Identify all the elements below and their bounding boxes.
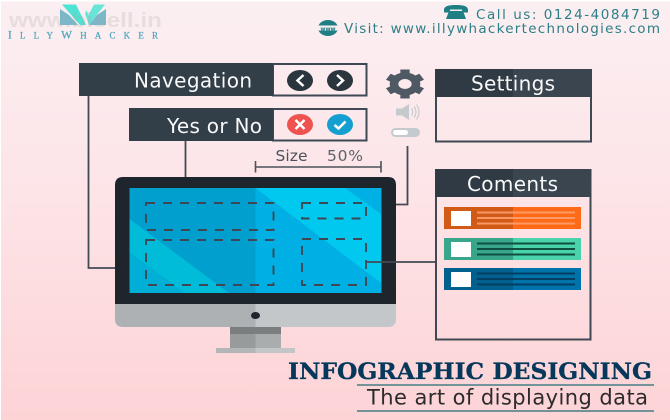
heading: yes or no: Yes or No: [166, 114, 262, 138]
stand: [216, 327, 295, 353]
comment: green: [444, 238, 581, 260]
icon: speaker: [396, 104, 419, 120]
button: yes: [327, 114, 353, 135]
comment: blue: [444, 268, 581, 290]
subtitle: The art of displaying data: [366, 386, 648, 410]
logo: IllyWhacker: I LLY W HACKER: [8, 30, 158, 42]
title: INFOGRAPHIC DESIGNING: [288, 359, 652, 385]
screen: [130, 188, 382, 293]
panel: navigation: [79, 63, 366, 96]
icon: globe www: [318, 20, 338, 36]
heading: comments: Coments: [467, 172, 558, 196]
size indicator: [256, 147, 381, 172]
monitor: [115, 177, 396, 353]
heading: settings: Settings: [471, 72, 555, 96]
logo: IllyWhacker: [8, 4, 158, 42]
icon: telephone: [444, 5, 468, 19]
button: forward: [327, 70, 353, 91]
comment: orange: [444, 207, 581, 229]
icon: toggle: [391, 128, 420, 137]
icon: globe www: www: [320, 26, 336, 32]
heading: navigation: Navegation: [134, 68, 252, 92]
panel: settings: [435, 69, 592, 142]
label: size: Size: [276, 147, 308, 165]
button: no: [287, 114, 313, 135]
connector: yes or no to screen: [184, 141, 186, 203]
panel: yes or no: [129, 108, 366, 141]
monitor body: [115, 177, 396, 304]
watermark: www.bisell.in: www.bisell.in: [8, 9, 162, 32]
contact: website: Visit: www.illywhackertechnologies.com: [344, 21, 660, 37]
connector: settings to screen: [366, 146, 408, 204]
label: 50%: 50%: [327, 147, 363, 165]
panel: comments: [435, 169, 592, 340]
icon: gear: [386, 70, 424, 98]
connector: comments to screen: [366, 261, 435, 263]
button: back: [287, 70, 313, 91]
contact: call us: Call us: 0124-4084719: [476, 7, 660, 23]
dashed layout areas: [146, 203, 366, 285]
connector: navigation to screen: [88, 96, 146, 268]
